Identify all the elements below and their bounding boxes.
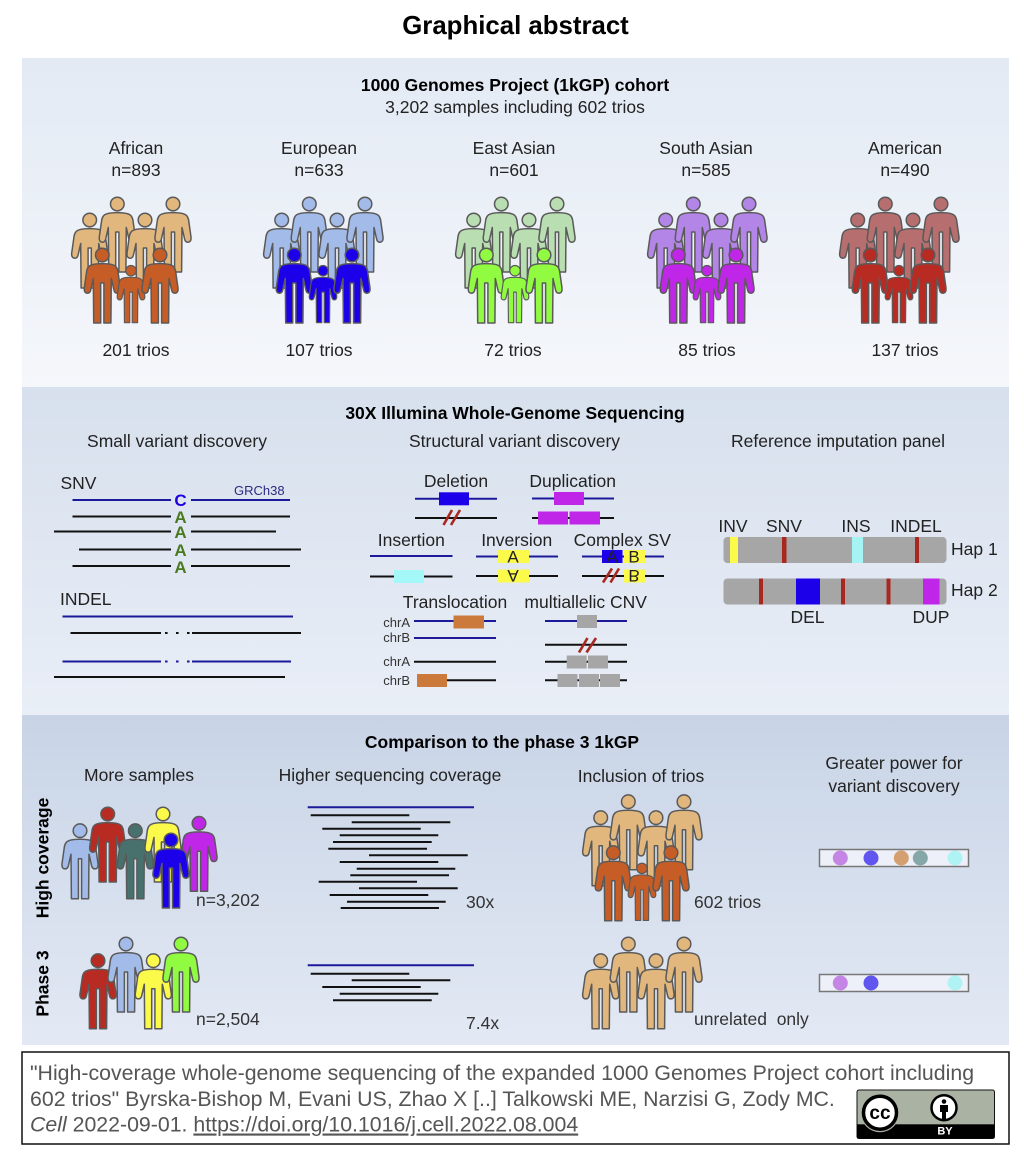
diagram: INDEL read alignment: INDEL <box>60 589 112 609</box>
diagram: duplication: Duplication <box>529 471 616 491</box>
diagram: SNV read alignment: C <box>174 491 187 510</box>
diagram: SNV read alignment <box>54 473 301 577</box>
icon: South Asian family group <box>648 197 767 323</box>
diagram: deletion <box>415 471 497 525</box>
diagram: SNV read alignment: A <box>174 541 187 560</box>
diagram: deletion: Deletion <box>424 471 488 491</box>
icon: high coverage sample people <box>62 807 217 908</box>
group label: American: American <box>868 138 942 158</box>
panel: comparison to phase 3 <box>22 715 1009 1045</box>
diagram: haplotype 1 bar: SNV <box>766 516 802 536</box>
diagram: insertion <box>370 530 452 583</box>
diagram: SNV read alignment: A <box>174 558 187 577</box>
variant bar: high coverage <box>820 850 968 866</box>
diagram: haplotype 1 bar: INS <box>841 516 871 536</box>
panel heading: sequencing: 30X Illumina Whole-Genome Sequencing <box>345 403 685 423</box>
diagram: insertion: Insertion <box>378 530 445 550</box>
diagram: 30x coverage reads: 30x <box>466 892 494 912</box>
column heading: coverage: Higher sequencing coverage <box>279 765 501 785</box>
diagram: SNV read alignment: A <box>174 508 187 527</box>
sample count: phase 3: n=2,504 <box>196 1009 260 1029</box>
diagram: translocation: chrA <box>383 654 410 669</box>
diagram: translocation: chrA <box>383 615 410 630</box>
column heading: structural variants: Structural variant discovery <box>409 431 620 451</box>
icon: East Asian family group <box>456 197 575 323</box>
diagram: translocation: chrB <box>383 630 410 645</box>
citation box: "High-coverage whole-genome sequencing of the expanded 1000 Genomes Project cohort including <box>30 1061 974 1085</box>
diagram: haplotype 1 bar <box>718 516 998 563</box>
row label: phase 3: Phase 3 <box>32 950 52 1017</box>
trio count: East Asian: 72 trios <box>484 340 542 360</box>
diagram: complex SV <box>574 530 671 585</box>
column heading: power <box>825 753 963 796</box>
trio count: African: 201 trios <box>102 340 170 360</box>
panel: 30X Illumina Whole-Genome Sequencing <box>22 387 1009 715</box>
column heading: power: variant discovery <box>828 776 960 796</box>
diagram: 7.4x coverage reads <box>308 965 499 1033</box>
group label: African: African <box>109 138 163 158</box>
diagram: translocation: chrB <box>383 673 410 688</box>
diagram: complex SV: Complex SV <box>574 530 671 550</box>
unrelated label: unrelated only <box>694 1009 809 1029</box>
panel heading: comparison: Comparison to the phase 3 1kGP <box>365 732 639 752</box>
diagram: translocation <box>383 592 507 688</box>
panel heading: cohort: 1000 Genomes Project (1kGP) cohort <box>361 75 669 95</box>
trio count: American: 137 trios <box>871 340 939 360</box>
diagram: SNV read alignment: A <box>174 523 187 542</box>
group label: South Asian: South Asian <box>659 138 753 158</box>
icon: unrelated individuals <box>583 937 702 1029</box>
diagram: haplotype 2 bar <box>724 578 998 627</box>
column heading: samples: More samples <box>84 765 194 785</box>
diagram: duplication <box>529 471 616 524</box>
diagram: inversion: A <box>507 566 519 585</box>
count: South Asian: n=585 <box>681 160 731 180</box>
column heading: power: Greater power for <box>825 753 963 773</box>
citation box <box>22 1052 1009 1144</box>
diagram: haplotype 1 bar: Hap 1 <box>951 539 998 559</box>
column heading: small variants: Small variant discovery <box>87 431 267 451</box>
diagram: haplotype 2 bar: DEL <box>790 607 825 627</box>
count: East Asian: n=601 <box>489 160 539 180</box>
diagram: INDEL read alignment <box>54 589 301 677</box>
icon: family with 602 trios <box>583 795 702 921</box>
diagram: multiallelic CNV: multiallelic CNV <box>524 592 647 612</box>
citation box: 602 trios" Byrska-Bishop M, Evani US, Zhao X [..] Talkowski ME, Narzisi G, Zody MC. <box>30 1087 835 1111</box>
trio count: South Asian: 85 trios <box>678 340 736 360</box>
variant bar: phase 3 <box>820 974 968 992</box>
title: Graphical abstract <box>402 12 629 40</box>
icon: CC BY license badge: BY <box>937 1126 953 1138</box>
icon: European family group <box>264 197 383 323</box>
count: African: n=893 <box>111 160 161 180</box>
trio label: 602 trios <box>694 892 761 912</box>
diagram: haplotype 2 bar: DUP <box>913 607 949 627</box>
icon: CC BY license badge <box>857 1090 994 1138</box>
icon: phase 3 sample people <box>80 937 199 1029</box>
panel: 1000 Genomes Project cohort <box>22 58 1009 387</box>
icon: CC BY license badge: cc <box>869 1103 891 1124</box>
diagram: inversion: Inversion <box>481 530 552 550</box>
diagram: inversion <box>476 530 558 585</box>
row label: high coverage: High coverage <box>32 797 52 918</box>
diagram: complex SV: A <box>606 548 618 566</box>
icon: American family group <box>840 197 959 323</box>
diagram: 30x coverage reads <box>308 807 494 912</box>
group label: East Asian: East Asian <box>473 138 555 158</box>
sample count: high coverage: n=3,202 <box>196 890 260 910</box>
diagram: SNV read alignment: GRCh38 <box>234 483 285 498</box>
diagram: translocation: Translocation <box>403 592 507 612</box>
diagram: complex SV: B <box>628 566 640 585</box>
diagram: complex SV: B <box>628 548 640 566</box>
diagram: multiallelic CNV <box>524 592 647 687</box>
diagram: SNV read alignment: SNV <box>60 473 97 493</box>
column heading: trios: Inclusion of trios <box>578 766 704 786</box>
trio count: European: 107 trios <box>285 340 353 360</box>
subheading: samples: 3,202 samples including 602 trios <box>385 97 645 117</box>
diagram: haplotype 1 bar: INDEL <box>890 516 942 536</box>
column heading: imputation panel: Reference imputation panel <box>731 431 945 451</box>
diagram: haplotype 2 bar: Hap 2 <box>951 580 998 600</box>
count: European: n=633 <box>294 160 344 180</box>
citation box: Cell 2022-09-01. https://doi.org/10.1016/j.cell.2022.08.004 <box>30 1112 578 1136</box>
diagram: 7.4x coverage reads: 7.4x <box>466 1013 499 1033</box>
count: American: n=490 <box>880 160 930 180</box>
group label: European: European <box>281 138 357 158</box>
diagram: haplotype 1 bar: INV <box>718 516 748 536</box>
icon: African family group <box>72 197 191 323</box>
diagram: inversion: A <box>507 548 519 566</box>
